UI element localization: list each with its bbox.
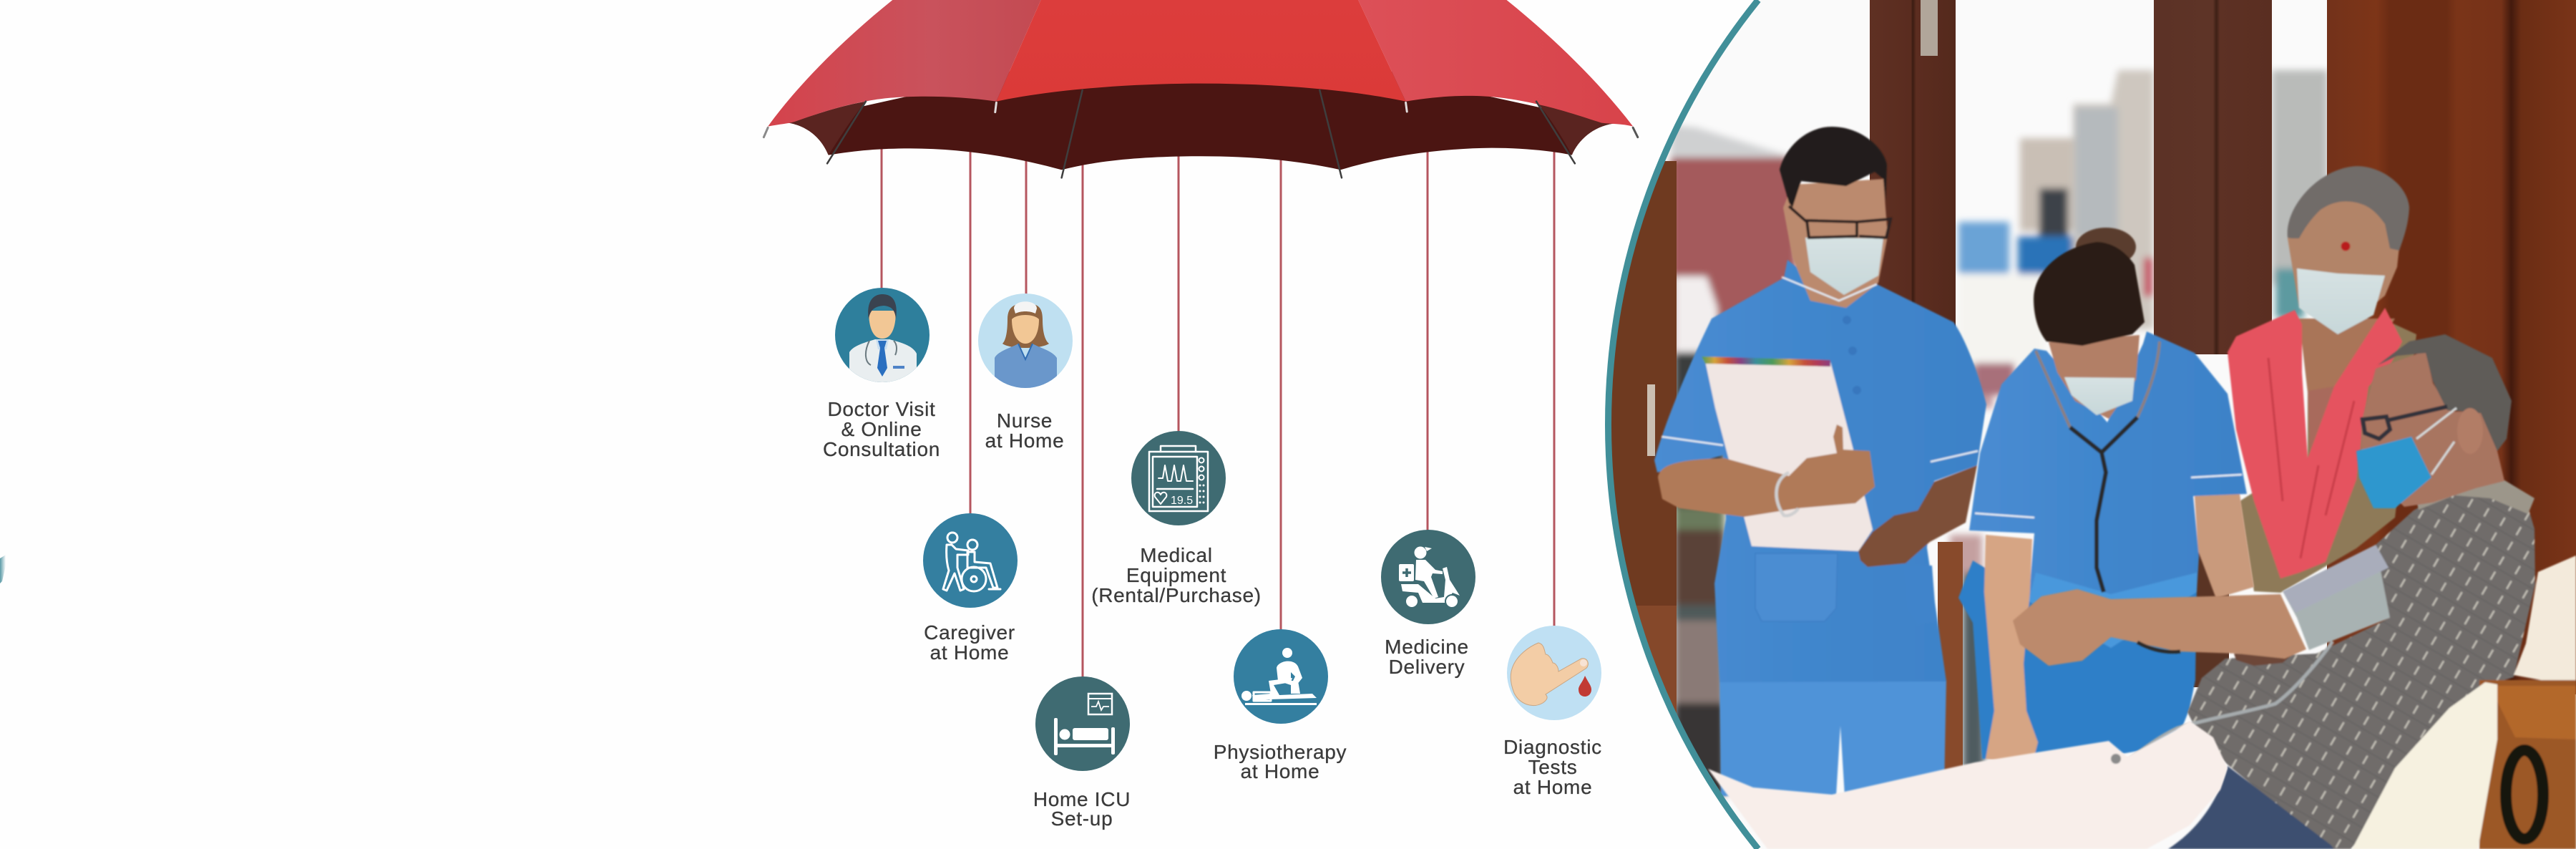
window frame one: [1870, 0, 1963, 778]
bindi: [2341, 242, 2350, 251]
clipboard tabs: [1702, 356, 1830, 367]
label: medical equipment: Equipment: [1126, 564, 1226, 586]
left edge mark: [0, 555, 6, 583]
left arm and hand: [1984, 535, 2038, 765]
fingers under arm: [2234, 654, 2292, 666]
icon: doctor: [835, 288, 930, 382]
floral accent: [2308, 387, 2334, 451]
buttons: [1843, 316, 1861, 394]
sleeve piping: [1975, 475, 2242, 518]
head: [2288, 197, 2399, 334]
cuff flap: [2283, 545, 2389, 613]
blue mask: [2356, 437, 2431, 508]
bun: [2076, 228, 2136, 266]
service: doctor visit: [823, 288, 940, 460]
umbrella ribs: [763, 90, 1638, 178]
mask straps: [2416, 408, 2457, 475]
stethoscope below arm: [2137, 642, 2180, 652]
glasses: [2363, 407, 2447, 439]
stethoscope lower tube: [2070, 417, 2137, 592]
umbrella: [763, 0, 1638, 178]
person: male nurse: [1654, 127, 1986, 796]
left door frame: [1611, 161, 1677, 713]
label: diagnostic tests: Tests: [1528, 756, 1577, 778]
label: medicine delivery: Delivery: [1389, 656, 1465, 678]
label: diagnostic tests: at Home: [1513, 776, 1592, 798]
icon: physiotherapy: [1234, 629, 1328, 724]
window backdrop: [1603, 0, 2576, 849]
service: medical equipment: [1091, 431, 1262, 606]
hair: [2288, 166, 2409, 251]
service: caregiver: [923, 513, 1018, 664]
canopy left panel: [768, 0, 1041, 127]
mask: [1805, 238, 1883, 295]
label: medicine delivery: Medicine: [1385, 636, 1469, 658]
icon: finger with blood drop: [1507, 626, 1601, 720]
tube: [2127, 641, 2333, 761]
tube connector: [2111, 754, 2121, 764]
label: doctor visit: Doctor Visit: [827, 398, 936, 420]
service: medicine delivery: [1381, 530, 1475, 678]
icon: nurse: [978, 293, 1073, 388]
umbrella side shade left: [789, 102, 866, 155]
person: female nurse: [1958, 228, 2254, 765]
label: caregiver: at Home: [930, 641, 1009, 664]
near arm and hand on clipboard: [1658, 424, 1875, 517]
person: patient: [2013, 334, 2576, 849]
label: medical equipment: Medical: [1140, 544, 1213, 566]
blurred background scenery: [1671, 70, 2328, 796]
scrub top: [1654, 260, 1986, 682]
front pillow: [2352, 682, 2497, 849]
rear pillow: [2514, 556, 2576, 687]
collar: [2416, 479, 2534, 514]
service: nurse: [978, 293, 1073, 452]
icon: monitor: [1131, 431, 1226, 525]
scarf folds: [2268, 358, 2354, 558]
red scarf: [2228, 308, 2402, 578]
nurse scrub top: [1969, 331, 2247, 648]
glasses: [1789, 206, 1890, 238]
icon: monitor: 19.5: [1171, 495, 1193, 507]
canopy right panel: [1358, 0, 1633, 127]
dark gap behind the patient: [2193, 551, 2229, 687]
window frame two: [2154, 0, 2272, 354]
pocket: [1755, 553, 1838, 621]
service: physiotherapy: [1214, 629, 1347, 782]
right arm: [2195, 494, 2254, 598]
label: nurse: Nurse: [997, 409, 1053, 432]
mask: [2064, 377, 2135, 415]
icon: ICU bed: [1035, 676, 1130, 771]
bangle: [1776, 472, 1798, 515]
hair: [1780, 127, 1887, 208]
jeans: [2168, 766, 2334, 849]
label: physiotherapy: at Home: [1241, 760, 1319, 782]
label: home ICU: Home ICU: [1033, 788, 1131, 810]
label: caregiver: Caregiver: [924, 621, 1015, 644]
ear: [2457, 408, 2483, 454]
nurse trousers: [1958, 561, 2197, 759]
person: older woman: [2228, 166, 2416, 593]
label: physiotherapy: Physiotherapy: [1214, 741, 1347, 763]
floral dress: [2240, 322, 2416, 593]
stethoscope upper tubes: [2036, 341, 2160, 427]
heart: [1155, 493, 1166, 504]
label: diagnostic tests: Diagnostic: [1503, 736, 1602, 758]
neck and face: [2361, 351, 2504, 507]
canopy center panel: [996, 0, 1406, 102]
patient arm and hand: [2013, 589, 2306, 666]
service strings: [882, 136, 1554, 677]
right pocket: [1928, 564, 1936, 601]
label: doctor visit: & Online: [841, 418, 922, 440]
patient hair: [2378, 334, 2512, 451]
curtain: [2327, 0, 2576, 694]
sleeve piping: [1662, 437, 1978, 462]
label: home ICU: Set-up: [1051, 807, 1113, 830]
face: [2049, 335, 2140, 419]
label: doctor visit: Consultation: [823, 438, 940, 460]
lighter lower panel: [2029, 573, 2197, 648]
trousers: [1719, 680, 1946, 796]
face: [1783, 179, 1888, 308]
clipboard: [1704, 358, 1873, 551]
blood pressure cuff: [2283, 545, 2390, 650]
patient shirt: [2187, 487, 2535, 849]
icon: caregiver with wheelchair: [923, 513, 1018, 608]
mask: [2297, 268, 2385, 334]
label: medical equipment: (Rental/Purchase): [1091, 584, 1262, 606]
bedside table: [2479, 680, 2576, 849]
umbrella underside: [789, 72, 1614, 170]
hair: [2034, 242, 2145, 346]
photo frame arc: [1608, 0, 1758, 849]
umbrella side shade right: [1536, 102, 1614, 155]
far arm and hand: [1858, 465, 1977, 567]
blanket: [1708, 721, 2228, 849]
photo: home healthcare team with patient: [1603, 0, 2576, 849]
icon: delivery scooter: [1381, 530, 1475, 624]
collar and piping: [1782, 277, 1877, 301]
service: home ICU: [1033, 676, 1131, 830]
service: diagnostic tests: [1503, 626, 1602, 798]
neck and chest: [2299, 319, 2395, 392]
label: nurse: at Home: [985, 430, 1064, 452]
